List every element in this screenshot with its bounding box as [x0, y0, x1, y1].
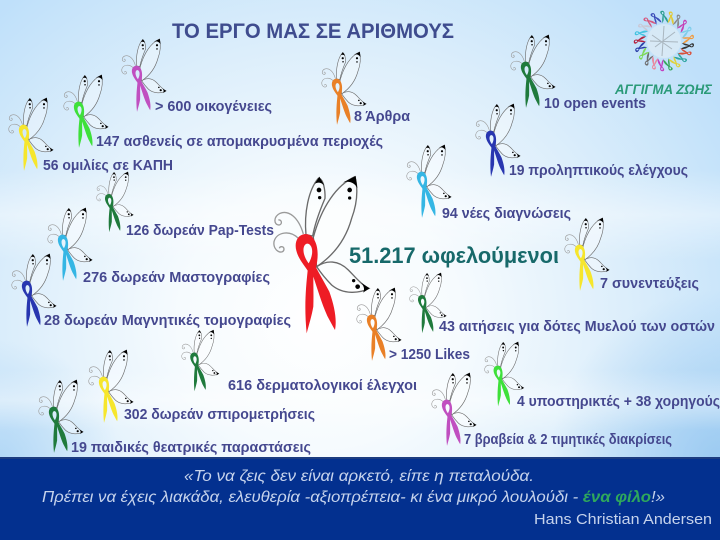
label: MRI: 28 δωρεάν Μαγνητικές τομογραφίες [44, 313, 291, 329]
butterfly: light blue, diagnoses [407, 145, 451, 218]
butterfly: orange, likes [357, 288, 401, 361]
butterfly: purple, families [122, 39, 166, 112]
quote line 2: Πρέπει να έχεις λιακάδα, ελευθερία -αξιοπρέπεια- κι ένα μικρό λουλούδι - ένα φίλο!» [42, 489, 665, 506]
quote line 1: «Το να ζεις δεν είναι αρκετό, είπε η πεταλούδα. [184, 468, 534, 485]
label: likes: > 1250 Likes [389, 347, 470, 363]
footer band [0, 457, 720, 540]
label: diagnoses: 94 νέες διαγνώσεις [442, 206, 571, 222]
label: articles: 8 Άρθρα [354, 109, 410, 125]
butterfly: orange, articles [322, 52, 366, 125]
butterfly: navy, MRI [12, 254, 56, 327]
label: dermatology: 616 δερματολογικοί έλεγχοι [228, 378, 417, 394]
label: awards: 7 βραβεία & 2 τιμητικές διακρίσεις [464, 432, 672, 448]
label: remote patients: 147 ασθενείς σε απομακρυσμένα περιοχές [96, 134, 383, 150]
label: theatre: 19 παιδικές θεατρικές παραστάσεις [71, 440, 311, 456]
butterfly: yellow, talks [9, 98, 53, 171]
butterfly: green, sponsors [485, 342, 524, 406]
quote attribution: Hans Christian Andersen [534, 511, 712, 528]
label: mammograms: 276 δωρεάν Μαστογραφίες [83, 270, 270, 286]
logo: ring of ribbons [634, 11, 694, 71]
label: bone marrow: 43 αιτήσεις για δότες Μυελού των οστών [439, 319, 715, 335]
butterfly: purple, awards [432, 373, 476, 446]
butterfly: green, bone marrow [410, 273, 446, 333]
label: interviews: 7 συνεντεύξεις [600, 276, 699, 292]
butterfly: dark green, open events [511, 35, 555, 108]
headline number: 51.217 ωφελούμενοι [349, 243, 559, 268]
butterfly: blue, screenings [476, 104, 520, 177]
title: ΤΟ ΕΡΓΟ ΜΑΣ ΣΕ ΑΡΙΘΜΟΥΣ [172, 20, 454, 43]
butterfly: green, dermatology [182, 330, 219, 391]
butterfly: yellow, spirometry [89, 350, 133, 423]
butterfly: green, theatre [39, 380, 83, 453]
butterfly: green, pap tests [97, 172, 133, 232]
logo text: ΑΓΓΙΓΜΑ ΖΩΗΣ [614, 81, 713, 97]
label: families: > 600 οικογένειες [155, 99, 272, 115]
butterfly: green, remote patients [64, 75, 108, 148]
central red butterfly [274, 176, 370, 333]
label: screenings: 19 προληπτικούς ελέγχους [509, 163, 688, 179]
butterfly: light blue, mammograms [48, 208, 92, 281]
label: spirometry: 302 δωρεάν σπιρομετρήσεις [124, 407, 315, 423]
label: open events: 10 open events [544, 96, 646, 112]
label: pap tests: 126 δωρεάν Pap-Tests [126, 223, 274, 239]
label: talks: 56 ομιλίες σε ΚΑΠΗ [43, 158, 173, 174]
butterfly: yellow, interviews [565, 218, 609, 291]
